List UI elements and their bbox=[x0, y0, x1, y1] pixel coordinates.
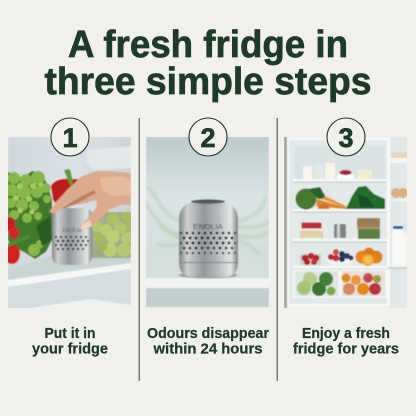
divider: between steps 1 and 2 bbox=[139, 118, 140, 381]
red tomatoes and pepper at left bbox=[8, 216, 30, 264]
panel: step 2 photo of canister on shelf with odour wisps bbox=[146, 137, 269, 308]
shelf front edge bbox=[8, 263, 131, 287]
step badge 3 bbox=[327, 118, 365, 156]
caption step 2: Odours disappear bbox=[147, 325, 269, 342]
title: three simple steps bbox=[44, 61, 372, 103]
glass shelf surface bbox=[8, 256, 125, 280]
stainless canister: ENOLIA bbox=[62, 228, 82, 234]
vegetables shelf bbox=[296, 186, 385, 210]
caption step 1 bbox=[32, 325, 108, 358]
fridge door bbox=[389, 137, 407, 308]
crisper drawers bbox=[294, 270, 386, 297]
caption step 3: fridge for years bbox=[293, 340, 399, 358]
fridge interior bbox=[284, 137, 407, 308]
stainless canister: ENOLIA bbox=[193, 224, 223, 231]
top shelf jars and berries bbox=[303, 163, 372, 179]
lower compartment bbox=[130, 270, 131, 304]
upper fridge shelf detail bbox=[86, 146, 131, 170]
fridge rear wall bbox=[294, 146, 385, 180]
door shelves and bottles bbox=[387, 152, 408, 269]
title bbox=[44, 24, 372, 103]
caption step 2 bbox=[147, 325, 269, 358]
caption step 2: within 24 hours bbox=[153, 340, 262, 358]
step badge 1: 1 bbox=[62, 123, 78, 153]
step badge 2: 2 bbox=[200, 123, 216, 153]
hand bbox=[49, 171, 131, 229]
fridge cabinet edge bbox=[284, 137, 287, 308]
lower band bbox=[146, 288, 269, 307]
lettuce bbox=[6, 171, 52, 259]
canister shadow bbox=[178, 273, 238, 279]
containers shelf bbox=[299, 218, 380, 239]
step badge 3: 3 bbox=[338, 123, 354, 153]
caption step 3: Enjoy a fresh bbox=[302, 325, 390, 342]
caption step 1: Put it in bbox=[44, 325, 96, 342]
fridge interior background bbox=[8, 137, 131, 308]
odour wisps bbox=[146, 188, 269, 254]
shelf front edge bbox=[146, 278, 269, 288]
divider: between steps 2 and 3 bbox=[277, 118, 278, 381]
stainless canister bbox=[179, 199, 238, 277]
caption step 1: your fridge bbox=[32, 340, 108, 358]
lower white tray bbox=[30, 299, 131, 308]
stainless canister bbox=[52, 208, 92, 265]
step badge 1 bbox=[51, 118, 89, 156]
shelf surface bbox=[146, 246, 269, 278]
red bell pepper bbox=[51, 169, 78, 206]
panel: step 1 photo of hand placing canister in fridge bbox=[4, 137, 134, 308]
title: A fresh fridge in bbox=[68, 24, 348, 66]
bowls shelf bbox=[300, 248, 382, 266]
shelves bbox=[293, 179, 386, 270]
fridge background bbox=[146, 137, 269, 246]
step badge 2 bbox=[189, 118, 227, 156]
caption step 3 bbox=[293, 325, 399, 358]
grapes bbox=[92, 212, 134, 258]
panel: step 3 photo of an open fridge full of fresh food bbox=[284, 137, 408, 308]
